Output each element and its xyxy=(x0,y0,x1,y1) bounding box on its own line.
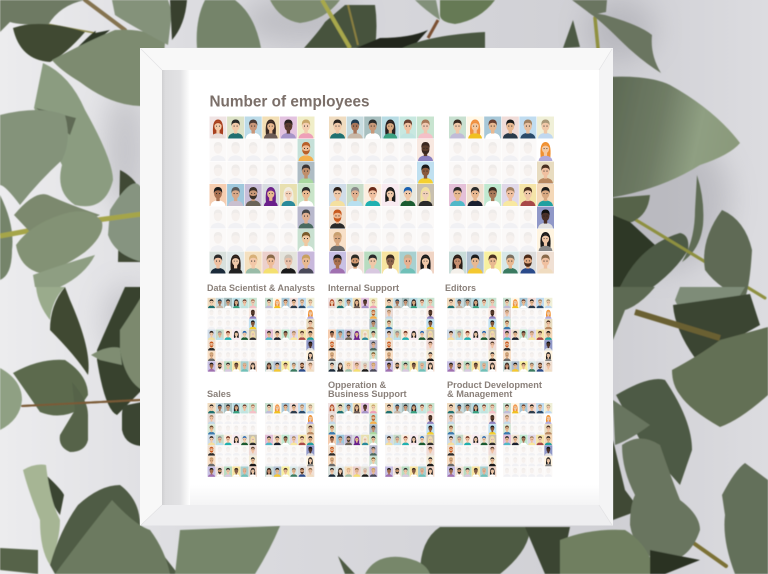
small grid: Product Development, second xyxy=(503,403,552,477)
heading: Product Development & Management: Product Development xyxy=(447,380,542,390)
leaf cluster: left middle xyxy=(0,63,142,287)
leaf cluster: left lower xyxy=(0,287,142,452)
small grid: Internal Support, first xyxy=(328,298,377,372)
small grid: Operation, second xyxy=(385,403,434,477)
small grid: Product Development, first xyxy=(447,403,496,477)
white picture frame xyxy=(140,48,613,526)
small grid: Sales, second xyxy=(265,403,314,477)
leaf cluster: bottom right xyxy=(613,287,768,574)
title: Number of employees xyxy=(210,94,370,110)
frame bottom rail xyxy=(140,505,613,526)
heading: Internal Support: Internal Support xyxy=(328,283,399,293)
chart: top portrait grid, left xyxy=(210,116,314,274)
small grid: Internal Support, second xyxy=(385,298,434,372)
frame mitre lines xyxy=(141,49,612,525)
small grid: Operation, first xyxy=(328,403,377,477)
small grid: Editors, first xyxy=(447,298,496,372)
small grid: Data Scientist, second xyxy=(265,298,314,372)
heading: Data Scientist & Analysts: Data Scientist & Analysts xyxy=(207,283,315,293)
small grid: Editors, second xyxy=(503,298,552,372)
soft shadows on the wall xyxy=(105,0,730,355)
small grid: Data Scientist, first xyxy=(208,298,257,372)
frame inner floor, bottom xyxy=(162,485,599,505)
heading: Opperation & Business Support: Opperation & xyxy=(328,380,387,390)
leaf cluster: top left xyxy=(0,0,187,106)
frame right rail xyxy=(599,48,613,525)
chart: top portrait grid, centre xyxy=(329,116,434,274)
frame inner wall, left xyxy=(162,70,190,505)
small grid: Sales, first xyxy=(208,403,257,477)
leaf cluster: bottom left xyxy=(0,465,280,574)
chart: top portrait grid, right xyxy=(449,116,554,274)
leaf cluster: bottom centre xyxy=(338,527,700,574)
heading: Product Development & Management: & Management xyxy=(447,389,512,399)
heading: Editors: Editors xyxy=(445,283,476,293)
leaf cluster: top right xyxy=(572,0,765,305)
leaf cluster: top centre xyxy=(197,0,580,48)
heading: Sales: Sales xyxy=(207,389,231,399)
heading: Opperation & Business Support: Business Support xyxy=(328,389,407,399)
